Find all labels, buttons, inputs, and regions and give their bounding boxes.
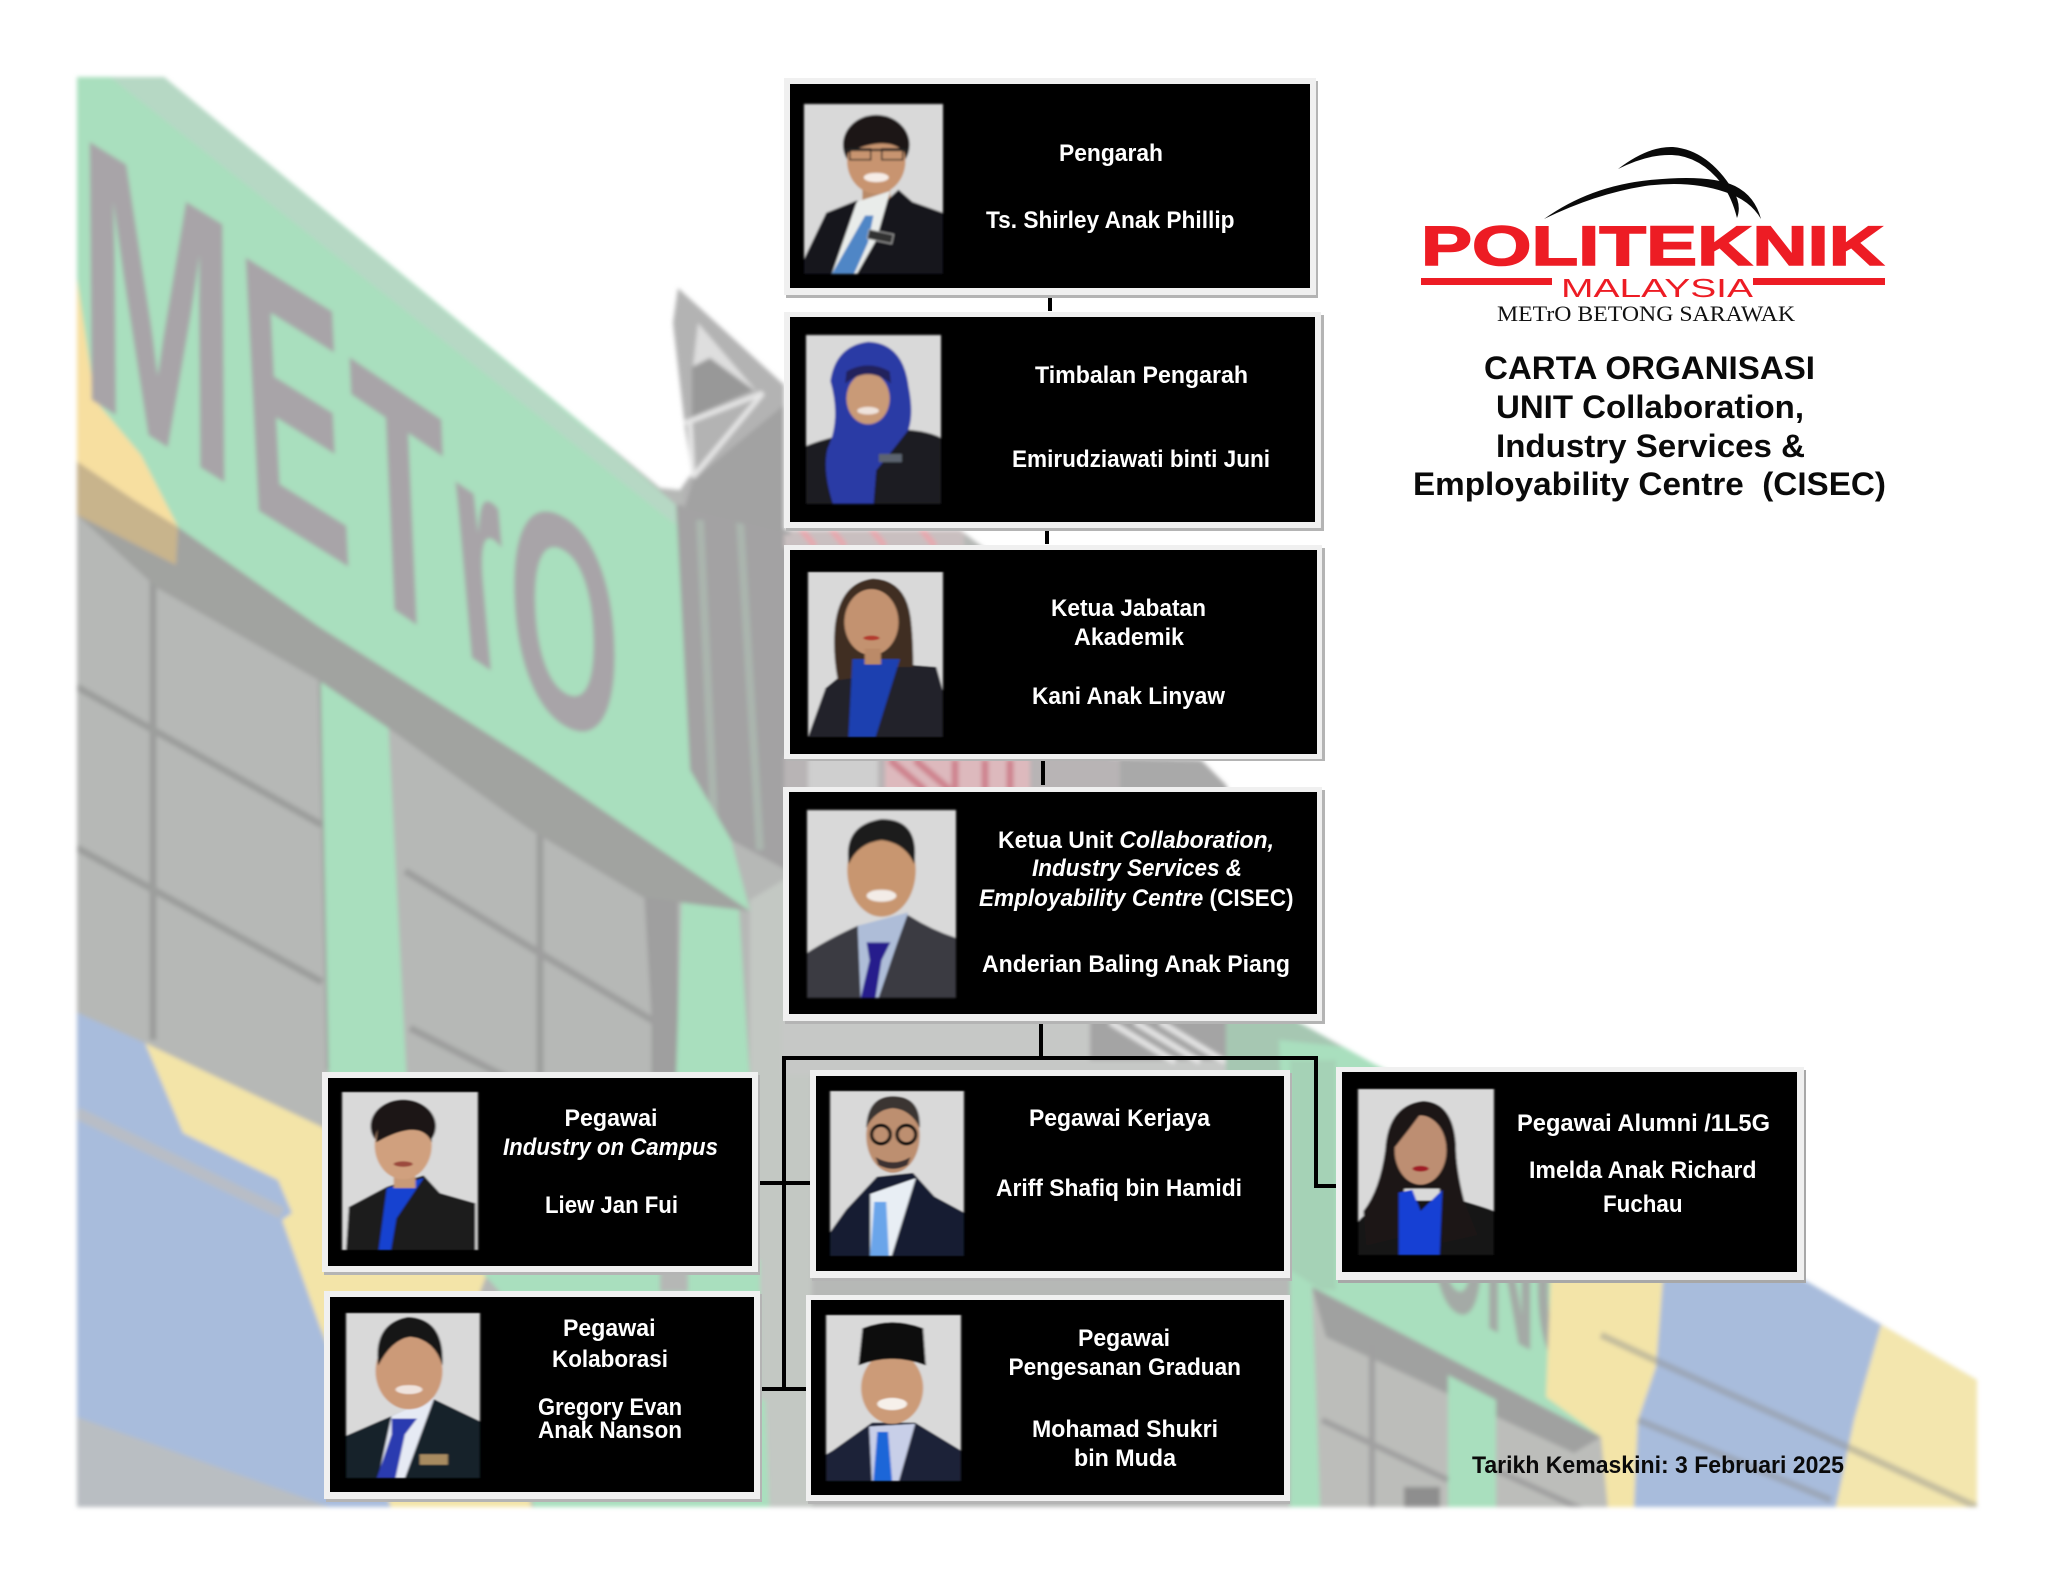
text: Emirudziawati binti Juni: Emirudziawati binti Juni: [1012, 446, 1270, 473]
text: bin Muda: bin Muda: [1074, 1445, 1177, 1472]
text: Kolaborasi: Kolaborasi: [552, 1346, 668, 1373]
text: Pegawai Alumni /1L5G: Pegawai Alumni /1L5G: [1517, 1110, 1770, 1137]
logo: Politeknik Malaysia: [1421, 147, 1885, 326]
centre window block mullions: [405, 830, 660, 1089]
dark shadow under fascia: [83, 519, 746, 912]
panel: Pegawai Alumni: [1336, 1067, 1806, 1283]
text: MALAYSIA: MALAYSIA: [1561, 273, 1754, 303]
text: Timbalan Pengarah: Timbalan Pengarah: [1035, 362, 1248, 389]
dark column behind boxes: [676, 505, 790, 872]
green lower centre: [482, 1262, 770, 1508]
METrO lettering: O: [503, 427, 626, 818]
METrO lettering: M: [76, 53, 238, 570]
text: Employability Centre: Employability Centre (CISEC): [979, 885, 1294, 912]
yellow cladding left: [145, 1043, 537, 1530]
text: Ts. Shirley Anak Phillip: Ts. Shirley Anak Phillip: [986, 207, 1234, 234]
photo: Ts. Shirley: [802, 102, 945, 276]
title: Carta Organisasi: Employability Centre (CISEC): [1413, 466, 1886, 502]
photo: Kani: [806, 571, 945, 738]
text: Pegawai: Pegawai: [564, 1105, 658, 1132]
text: Pengarah: Pengarah: [1059, 140, 1163, 167]
METrO lettering: T: [344, 285, 457, 721]
text: Ariff Shafiq bin Hamidi: Ariff Shafiq bin Hamidi: [996, 1175, 1242, 1202]
text: METrO BETONG SARAWAK: METrO BETONG SARAWAK: [1497, 301, 1795, 326]
panel: Ketua Jabatan Akademik: [784, 545, 1325, 761]
icon: black swooshes: [1544, 147, 1761, 219]
strip above box 4: [784, 758, 791, 787]
photo: Gregory: [344, 1312, 482, 1480]
panel: Pegawai Industry on Campus: [322, 1072, 760, 1275]
photo: Anderian: [805, 808, 958, 1000]
text: Ketua Unit Collaboration: Ketua Unit Collaboration,: [998, 827, 1274, 854]
green pillars: [320, 640, 407, 1085]
pink stripes between boxes: [782, 531, 964, 548]
title: Carta Organisasi: CARTA ORGANISASI: [1484, 350, 1815, 386]
blue cladding left: [76, 1012, 392, 1508]
METrO lettering: [88, 142, 617, 734]
panel: Pegawai Kolaborasi: [324, 1291, 762, 1502]
window block lower right: [1311, 1292, 1323, 1488]
green right of box column: [1279, 1040, 1620, 1437]
yellow strip: [74, 281, 179, 528]
red rule left: [1421, 278, 1552, 285]
yellow cladding right: [1544, 1283, 1665, 1510]
photo: Ariff: [828, 1090, 966, 1258]
panel: Ketua Unit CISEC: [783, 787, 1325, 1024]
text: Akademik: Akademik: [1074, 624, 1185, 651]
panel: Timbalan Pengarah: [784, 312, 1324, 531]
title: Carta Organisasi: UNIT Collaboration,: [1496, 389, 1804, 425]
text: Pegawai Kerjaya: Pegawai Kerjaya: [1029, 1105, 1211, 1132]
green fascia: [60, 60, 750, 911]
text: Industry Services: Industry Services &: [1032, 855, 1242, 882]
text: Liew Jan Fui: Liew Jan Fui: [545, 1192, 678, 1219]
text: update date: Tarikh Kemaskini: 3 Februari 2025: [1472, 1452, 1844, 1479]
METrO lettering: r: [435, 351, 523, 760]
text: Ketua Jabatan: Ketua Jabatan: [1051, 595, 1206, 622]
text: Kani Anak Linyaw: Kani Anak Linyaw: [1032, 683, 1225, 710]
text: Industry on Campus: Industry on Campus: [503, 1134, 718, 1161]
BETONG lettering fragment: ONG: [1430, 1117, 1589, 1425]
roof edge: [77, 77, 676, 525]
flag structure: [672, 285, 790, 535]
text: Anak Nanson: Anak Nanson: [538, 1417, 682, 1444]
panel: Pegawai Pengesanan Graduan: [806, 1295, 1290, 1504]
photo: Imelda: [1356, 1088, 1496, 1256]
text: POLITEKNIK: POLITEKNIK: [1421, 214, 1884, 277]
left window block mullions: [77, 570, 330, 1070]
text: Pegawai: Pegawai: [563, 1315, 656, 1342]
title: Carta Organisasi: [1413, 350, 1886, 502]
connectors between org chart boxes: [758, 296, 1337, 1391]
yellow cladding far right: [1834, 1324, 1980, 1510]
text: Pengesanan Graduan: Pengesanan Graduan: [1008, 1354, 1241, 1381]
title: Carta Organisasi: Industry Services &: [1496, 428, 1805, 464]
right of pillar light area: [750, 870, 812, 1510]
strip under box 4: [808, 1024, 1226, 1070]
blue cladding right: [1632, 1280, 1882, 1509]
text: Gregory Evan: Gregory Evan: [538, 1394, 682, 1421]
red rule right: [1753, 278, 1885, 285]
panel: Pengarah: [784, 78, 1318, 298]
text: Anderian Baling Anak Piang: Anderian Baling Anak Piang: [982, 951, 1290, 978]
text: Mohamad Shukri: Mohamad Shukri: [1032, 1416, 1218, 1443]
photo: Emirudziawati: [804, 333, 943, 506]
text: Imelda Anak Richard: Imelda Anak Richard: [1529, 1157, 1756, 1184]
panel: Pegawai Kerjaya: [810, 1070, 1292, 1281]
photo: Shukri: [824, 1314, 963, 1482]
text: Fuchau: Fuchau: [1603, 1191, 1682, 1218]
photo: Liew Jan Fui: [340, 1091, 480, 1251]
text: Pegawai: Pegawai: [1078, 1325, 1170, 1352]
METrO lettering: E: [231, 172, 359, 650]
